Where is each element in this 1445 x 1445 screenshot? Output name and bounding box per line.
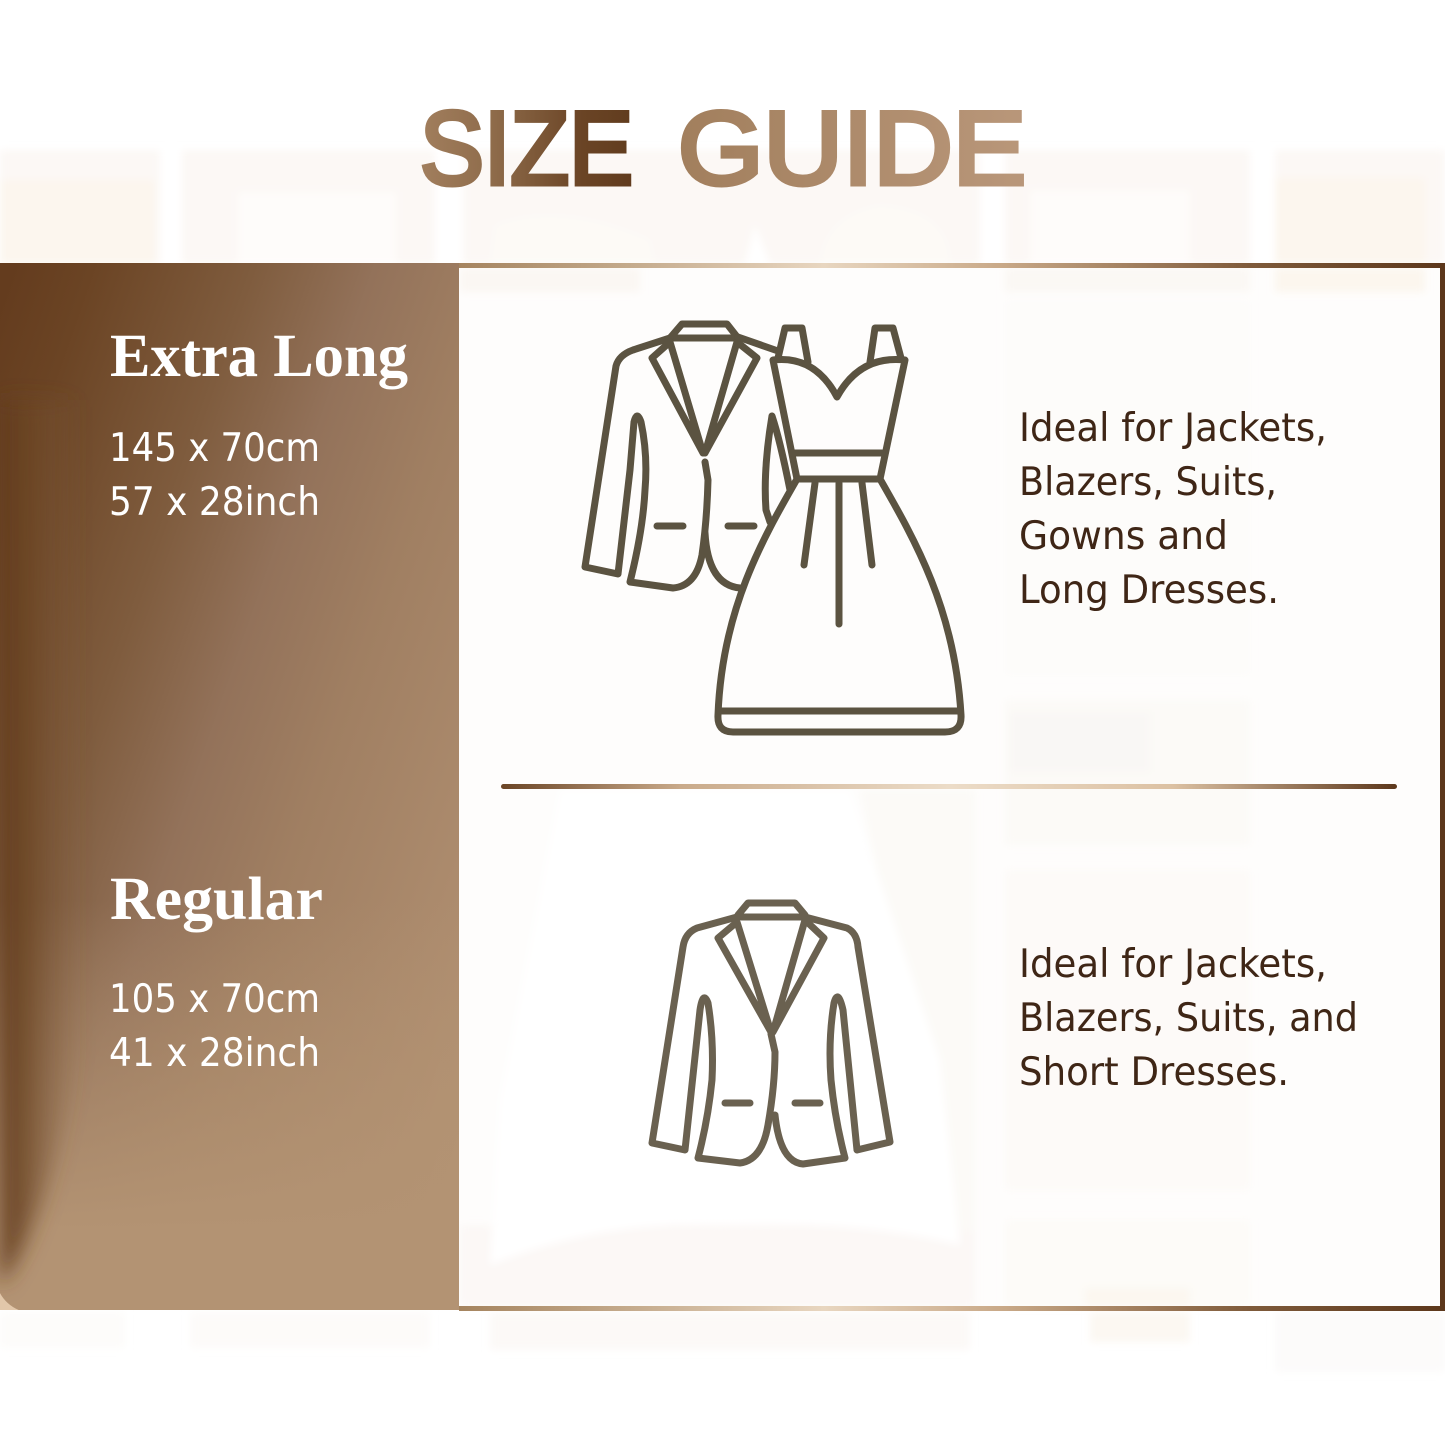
text block: Extra Long description [1019, 406, 1327, 613]
text block: Regular dimensions: 105 x 70cm [109, 977, 320, 1022]
divider [501, 784, 1397, 789]
heading: Extra Long: Extra Long [110, 323, 408, 390]
heading: Regular: Regular [110, 866, 323, 933]
text block: Regular description: Ideal for Jackets, [1019, 942, 1327, 987]
title: SIZE [420, 91, 633, 207]
icon part: dress [718, 328, 961, 732]
title [420, 91, 1026, 207]
icon part: jacket behind dress [585, 324, 790, 589]
text block: Extra Long dimensions [109, 426, 320, 525]
text block: Extra Long description: Blazers, Suits, [1019, 460, 1277, 505]
text block: Extra Long description: Gowns and [1019, 514, 1228, 559]
text block: Extra Long description: Ideal for Jackets, [1019, 406, 1327, 451]
title: GUIDE [678, 91, 1026, 207]
text block: Regular description: Short Dresses. [1019, 1050, 1289, 1095]
text block: Regular dimensions [109, 977, 320, 1076]
text block: Regular description: Blazers, Suits, and [1019, 996, 1358, 1041]
text block: Regular dimensions: 41 x 28inch [109, 1031, 320, 1076]
text block: Regular description [1019, 942, 1358, 1095]
text block: Extra Long dimensions: 57 x 28inch [109, 480, 320, 525]
icon: jacket and dress [585, 324, 961, 732]
panel: left brown column [0, 263, 459, 1312]
text block: Extra Long dimensions: 145 x 70cm [109, 426, 320, 471]
text block: Extra Long description: Long Dresses. [1019, 568, 1279, 613]
icon: jacket [652, 903, 890, 1164]
panel: content area with frame [459, 263, 1445, 1311]
